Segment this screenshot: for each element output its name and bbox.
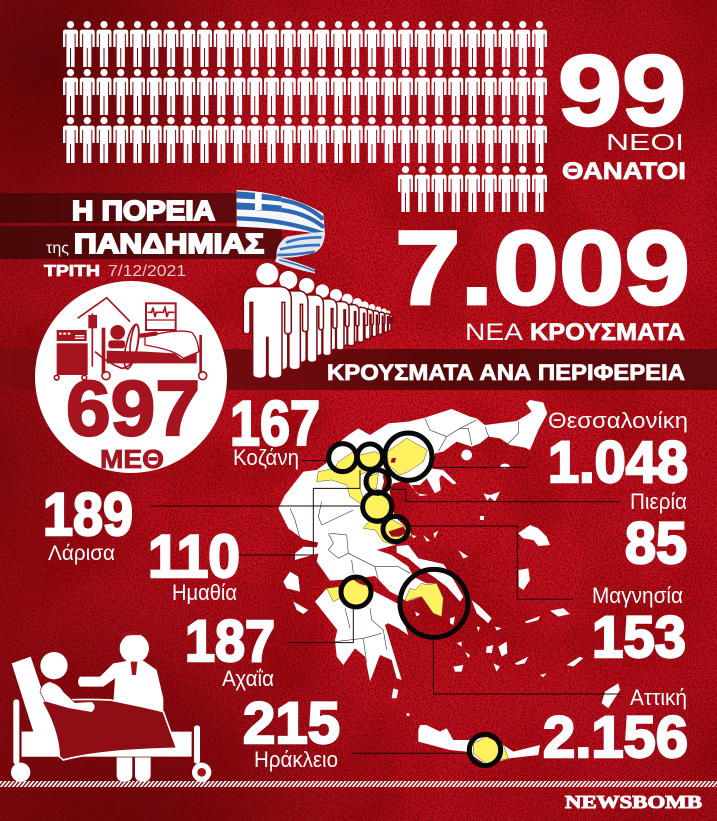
logo: Newsbomb: NEWSBOMB (565, 792, 702, 812)
date (44, 263, 186, 280)
label: Pieria: 85 (625, 511, 687, 576)
headline number: 99 new deaths: ΝΕΟΙ (606, 129, 684, 155)
label: Imathia: Ημαθία (172, 580, 237, 605)
label: Achaia: Αχαΐα (222, 666, 274, 691)
map: leader lines (150, 461, 620, 753)
label: Larisa: 189 (43, 481, 133, 548)
pictogram: 99 deaths (63, 21, 547, 212)
band: cases per region (0, 349, 717, 390)
headline number: 99 new deaths: 99 (558, 35, 686, 147)
label: Magnesia: Μαγνησία (592, 583, 683, 608)
label: Pieria: Πιερία (630, 489, 687, 514)
label: Heraklion: 215 (243, 691, 340, 756)
label: Attica: Αττική (630, 685, 687, 710)
icon: patient and doctor (11, 631, 211, 782)
headline number: 7.009 new cases: ΚΡΟΥΣΜΑΤΑ (530, 319, 685, 346)
headline number: 99 new deaths: ΘΑΝΑΤΟΙ (562, 158, 686, 185)
ICU label: ΜΕΘ (100, 444, 164, 474)
map: highlighted regions (317, 438, 508, 764)
label: Attica: 2.156 (543, 705, 688, 770)
title band: Η ΠΟΡΕΙΑ (72, 195, 215, 226)
ICU count: 697 (66, 364, 200, 452)
label: Thessaloniki: 1.048 (548, 430, 688, 495)
heading: cases per region: ΚΡΟΥΣΜΑΤΑ ΑΝΑ ΠΕΡΙΦΕΡΕΙΑ (327, 360, 685, 385)
map: sea details over highlights (352, 458, 407, 587)
label: Heraklion: Ηράκλειο (254, 747, 338, 772)
label: Magnesia: 153 (592, 605, 686, 670)
map: highlight circles (329, 433, 501, 766)
date: ΤΡΙΤΗ (44, 263, 100, 280)
label: Kozani: 167 (230, 389, 320, 459)
title band (0, 193, 282, 259)
headline number: 99 new deaths (558, 35, 686, 185)
label: Achaia: 187 (185, 609, 275, 674)
date: 7/12/2021 (108, 263, 186, 280)
title band: της (46, 240, 69, 257)
hatched divider (0, 781, 717, 787)
map: land (278, 400, 620, 765)
label: Thessaloniki: Θεσσαλονίκη (548, 408, 688, 433)
label: Imathia: 110 (148, 523, 240, 590)
headline number: 7.009 new cases: 7.009 (395, 210, 690, 327)
label: Larisa: Λάρισα (48, 542, 115, 565)
headline number: 7.009 new cases: ΝΕΑ (465, 319, 523, 346)
title band: ΠΑΝΔΗΜΙΑΣ (74, 228, 264, 259)
map of Greece (150, 400, 620, 766)
label: Kozani: Κοζάνη (233, 445, 299, 470)
panel: ICU circle (35, 281, 227, 474)
icon: ICU bed (54, 298, 207, 380)
map: region borders (290, 418, 518, 663)
icon: queue of people (243, 263, 393, 378)
icon: Greek flag ribbon (237, 190, 325, 273)
